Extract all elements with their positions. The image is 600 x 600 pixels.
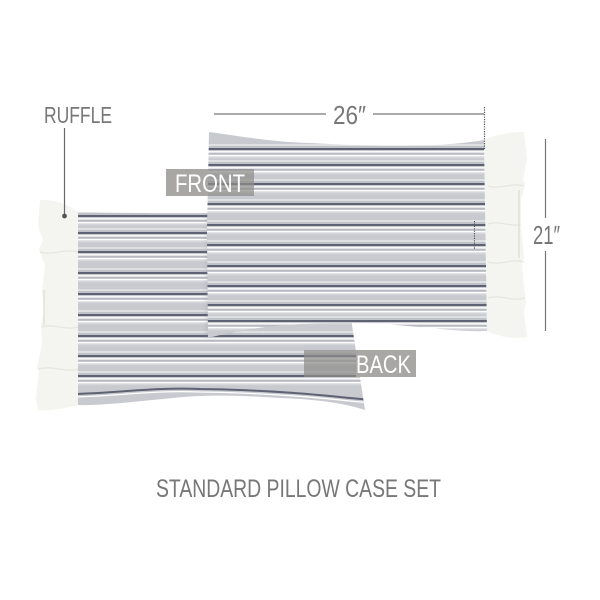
- label: back: [304, 350, 416, 379]
- pillow: front: [205, 132, 527, 338]
- label: front: FRONT: [175, 170, 245, 198]
- seam marker: [474, 221, 476, 249]
- title: STANDARD PILLOW CASE SET: [156, 475, 441, 503]
- pillow: back: [36, 200, 365, 410]
- fabric: back stripes: [78, 212, 365, 410]
- dimension: width 26 inches: 26″: [333, 100, 366, 130]
- callout: ruffle: [44, 102, 112, 218]
- label: back: BACK: [356, 351, 411, 379]
- ruffle folds: [38, 251, 78, 370]
- fabric: front stripes: [207, 132, 487, 337]
- ruffle: right: [484, 132, 527, 338]
- infographic: pillow case set: [36, 106, 560, 497]
- ruffle folds: [488, 185, 525, 299]
- dimension: height 21 inches: 21″: [533, 220, 560, 250]
- ruffle: left: [36, 200, 78, 411]
- shadow under front pillow: [205, 214, 235, 338]
- callout: ruffle: RUFFLE: [44, 102, 112, 128]
